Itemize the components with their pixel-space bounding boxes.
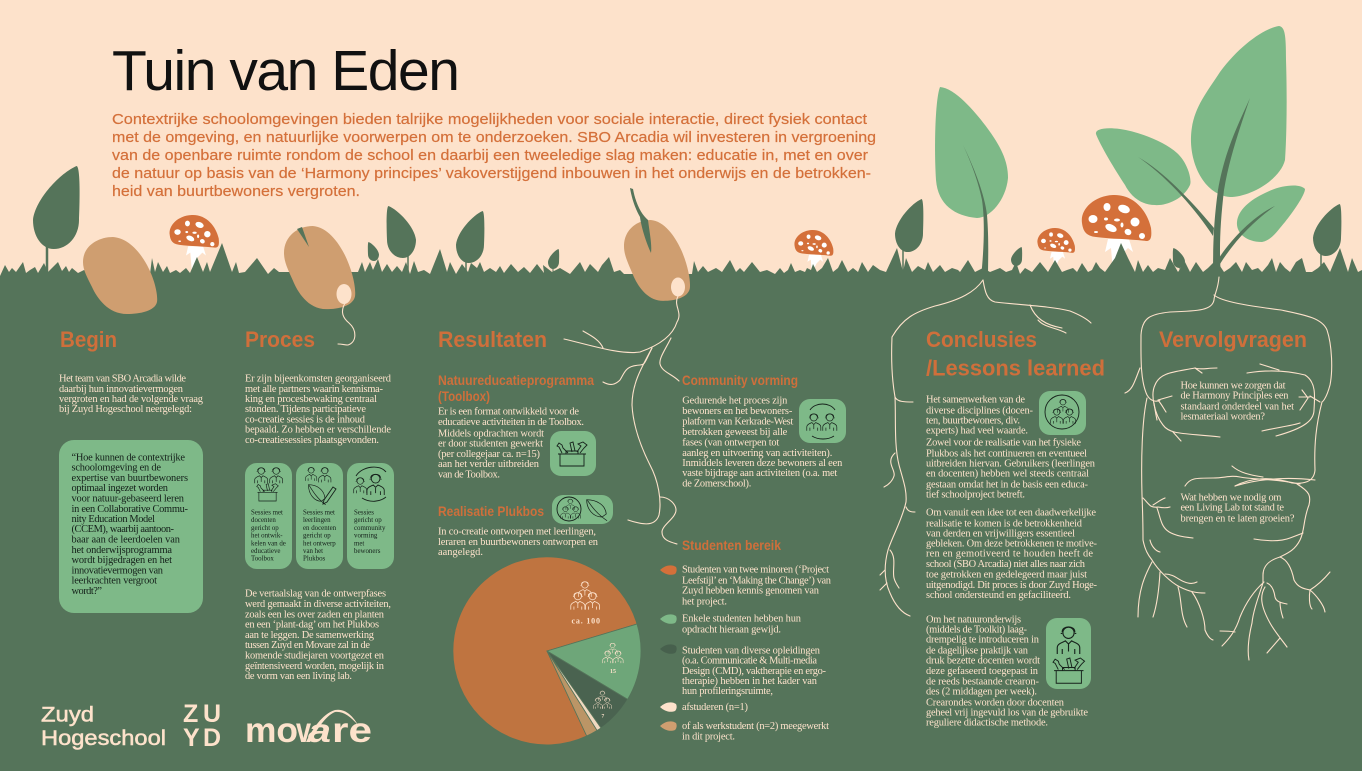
callout: research question: schoolomgeving en de	[72, 462, 161, 474]
text: natuuronderwijs: geheel vrij ingevuld los van de gebruikte	[926, 708, 1088, 718]
card: sessies met docenten: educatieve	[251, 548, 280, 555]
text: natuuronderwijs	[926, 614, 1088, 728]
card: sessies community vorming: community	[354, 525, 386, 532]
legend item: minoren	[660, 564, 832, 608]
block: Realisatie Plukbos: leraren en buurtbewoners ontworpen en	[438, 537, 599, 548]
question: Living Lab	[1180, 492, 1295, 524]
callout: research question	[59, 440, 203, 613]
block: Studenten bereik legend: Studenten bereik	[682, 537, 781, 553]
text: vertaalslag: geïntensiveerd worden, mogelijk in	[245, 661, 385, 672]
question: Harmony Principles: de Harmony Principles een	[1180, 390, 1289, 402]
seed: begin	[83, 237, 157, 314]
block: Community vorming: vaste bijdrage aan activiteiten (o.a. met	[682, 468, 837, 479]
text: betrokkenheid: van derden en vrijwilligers essentieel	[926, 528, 1075, 540]
callout: research question: in een Collaborative Commu-	[72, 504, 189, 515]
block: Natuureducatieprogramma: (per collegejaar ca. n=15)	[438, 449, 540, 460]
block: Realisatie Plukbos	[438, 495, 613, 558]
text: betrokkenheid	[926, 508, 1098, 601]
callout: research question: wordt?”	[72, 586, 102, 597]
callout: research question: nity Education Model	[72, 514, 155, 525]
mushroom: middle	[1037, 228, 1075, 270]
block: Community vorming: betrokken geweest bij alle	[682, 427, 788, 438]
heading: Conclusies / Lessons learned: Conclusies	[926, 327, 1037, 352]
logo: ZU YD: ZU	[183, 700, 221, 728]
slice: ca. 100	[453, 557, 637, 745]
text: vertaalslag: de vorm van een living lab.	[245, 671, 352, 682]
text: vertaalslag: zoals een les over zaden en planten	[245, 610, 385, 620]
text: vertaalslag: werd gemaakt in diverse activiteiten,	[245, 599, 391, 610]
icon: teacher with toolbox	[1046, 618, 1091, 689]
block: Studenten bereik legend	[660, 537, 832, 742]
icon: two people with leaf and pencil	[306, 467, 336, 505]
question: Living Lab: een Living Lab tot stand te	[1180, 502, 1284, 514]
legend item: afstuderen: afstuderen (n=1)	[682, 702, 748, 713]
label: 7: 7	[602, 714, 604, 720]
legend item: minoren: Zuyd hebben kennis genomen van	[682, 586, 820, 596]
legend item: minoren: Leefstijl’ en ‘Making the Change’) van	[682, 576, 832, 586]
question: Harmony Principles: Hoe kunnen we zorgen dat	[1180, 380, 1286, 392]
slice: 15	[547, 624, 641, 699]
block: Community vorming	[682, 372, 846, 490]
card: sessies met leerlingen: het ontwerp	[303, 540, 336, 548]
text: natuuronderwijs: deze gefaseerd toegepast in	[926, 666, 1039, 677]
card: sessies met docenten: docenten	[251, 517, 276, 524]
logo: Zuyd Hogeschool: Hogeschool	[41, 727, 166, 750]
text: betrokkenheid: toe getrokken en gedelegeerd maar juist	[926, 570, 1087, 580]
plant: sprout with one leaf	[935, 87, 1008, 277]
text: natuuronderwijs: de reeds bestaande crearon-	[926, 676, 1040, 688]
panel: Resultaten	[438, 327, 846, 742]
grass and soil	[0, 243, 1362, 771]
card: sessies met docenten: kelen van de	[251, 540, 286, 548]
block: Community vorming: Inmiddels leveren deze bewoners al een	[682, 458, 843, 469]
mushroom: large	[1082, 195, 1151, 272]
text: disciplines	[926, 394, 1096, 500]
text: introduction	[59, 374, 203, 415]
text: disciplines: Plukbos als het continueren en eventueel	[926, 448, 1087, 460]
callout: research question: wordt bijgedragen en het	[72, 555, 172, 566]
callout: research question: optimaal ingezet worden	[72, 483, 169, 494]
legend item: opleidingen: hun profileringsruimte,	[682, 686, 773, 697]
slice: 7	[547, 651, 628, 728]
text: betrokkenheid: realisatie te komen is de betrokkenheid	[926, 518, 1083, 530]
logo: Movare: re	[332, 711, 372, 750]
text: natuuronderwijs: Om het natuuronderwijs	[926, 614, 1021, 626]
logo: Zuyd Hogeschool	[41, 704, 166, 750]
legend item: opleidingen: therapie) hebben in het kader van	[682, 676, 818, 687]
legend item: minoren: Studenten van twee minoren (‘Project	[682, 564, 829, 576]
text: bijeenkomsten: met alle partners waarin kennisma-	[245, 384, 384, 395]
text: betrokkenheid: school (SBO Arcadia) niet alles naar zich	[926, 559, 1086, 570]
card: sessies community vorming: Sessies	[354, 510, 374, 516]
text: vertaalslag: tussen Zuyd en Movare zal in de	[245, 640, 370, 651]
card: sessies community vorming	[347, 463, 394, 569]
text: disciplines: uitbreiden hiervan. Gebruikers (leerlingen	[926, 458, 1096, 470]
card: sessies met leerlingen	[296, 463, 343, 569]
heading: Conclusies / Lessons learned	[926, 327, 1105, 380]
intro text: de natuur op basis van de ‘Harmony principes’ vakoverstijgend inbouwen in het onderwijs en de betrokken-	[112, 165, 871, 182]
card: sessies met leerlingen: van het	[303, 548, 323, 555]
pie chart: student reach	[453, 557, 640, 744]
block: Realisatie Plukbos: aangelegd.	[438, 547, 483, 558]
small dark leaves with stems	[33, 166, 1341, 276]
text: disciplines: experts) had veel waarde.	[926, 426, 1028, 436]
panel: Begin	[59, 327, 203, 613]
card: sessies met leerlingen: Plukbos	[303, 556, 326, 562]
text: vertaalslag: komende studiejaren voortgezet en	[245, 650, 385, 662]
text: disciplines: Het samenwerken van de	[926, 394, 1025, 406]
card: sessies community vorming: met	[354, 540, 364, 548]
text: disciplines: diverse disciplines (docen-	[926, 406, 1034, 416]
question: Harmony Principles: standaard onderdeel van het	[1180, 402, 1294, 412]
card: sessies met docenten: het ontwik-	[251, 532, 283, 540]
legend item: opleidingen: Design (CMD), vaktherapie en ergo-	[682, 666, 827, 677]
logo: ZU YD: YD	[183, 724, 221, 752]
panel: Vervolgvragen	[1159, 327, 1307, 524]
legend item: minoren: het project.	[682, 596, 727, 608]
block: Community vorming: Community vorming	[682, 372, 798, 388]
text: natuuronderwijs: Crearondes worden door docenten	[926, 698, 1065, 708]
card: sessies community vorming: vorming	[354, 532, 378, 540]
plant: large plant with three leaves	[1096, 26, 1305, 277]
logo: Movare: mo	[245, 711, 298, 750]
card: sessies met docenten: gericht op	[251, 525, 279, 532]
label: 7	[593, 691, 612, 720]
callout: research question: expertise van buurtbewoners	[72, 473, 188, 484]
seed: proces with small sprout and root	[284, 226, 355, 345]
text: natuuronderwijs: druk bezette docenten wordt	[926, 656, 1040, 666]
text: natuuronderwijs: des (2 middagen per week).	[926, 686, 1037, 698]
slice: werkstudent	[547, 651, 597, 736]
text: bijeenkomsten: co-creatiesessies plaatsgevonden.	[245, 435, 379, 446]
text: vertaalslag: aan te leggen. De samenwerking	[245, 630, 374, 641]
intro text: met de omgeving, en natuurlijke voorwerpen om te onderzoeken. SBO Arcadia wil investeren in vergroening	[112, 129, 876, 146]
callout: research question: leerkrachten vergroot	[72, 576, 157, 586]
roots: resultaten	[564, 296, 679, 544]
icon: residents in a cycle	[799, 399, 846, 443]
heading: Conclusies / Lessons learned: /Lessons learned	[926, 356, 1105, 380]
question: Living Lab: brengen en te laten groeien?	[1180, 514, 1295, 524]
block: Natuureducatieprogramma: aan het verder uitbreiden	[438, 459, 540, 470]
text: disciplines: en docenten) hebben wel steeds centraal	[926, 468, 1089, 480]
text: bijeenkomsten: Er zijn bijeenkomsten georganiseerd	[245, 374, 392, 384]
roots: conclusies	[880, 280, 1091, 616]
label: 15	[603, 643, 623, 675]
text: betrokkenheid: ren en gemotiveerd te houden heeft de	[926, 548, 1093, 560]
icon: two residents in a cycle	[354, 467, 386, 501]
block: Natuureducatieprogramma	[438, 372, 596, 480]
text: betrokkenheid: Om vanuit een idee tot een daadwerkelijke	[926, 508, 1096, 518]
block: Realisatie Plukbos: In co-creatie ontworpen met leerlingen,	[438, 526, 596, 538]
slice: afstuderen	[547, 651, 601, 730]
label: 15: 15	[610, 669, 616, 675]
panel: Proces	[245, 327, 394, 682]
intro text: Contextrijke schoolomgevingen bieden talrijke mogelijkheden voor sociale interactie, direct fysiek contact	[112, 111, 868, 128]
logo: Movare: a	[308, 712, 331, 749]
block: Community vorming: fases (van ontwerpen tot	[682, 438, 779, 448]
text: bijeenkomsten: stonden. Tijdens participatieve	[245, 404, 366, 415]
card: sessies met docenten: Sessies met	[251, 510, 283, 516]
callout: research question: “Hoe kunnen de contextrijke	[72, 452, 185, 464]
logo: Movare: v	[296, 711, 311, 750]
text: introduction: bij Zuyd Hogeschool neergelegd:	[59, 404, 192, 415]
callout: research question: voor natuur-gebaseerd leren	[72, 494, 185, 504]
icon: toolbox	[550, 431, 596, 476]
block: Natuureducatieprogramma: educatieve activiteiten in de Toolbox.	[438, 417, 584, 428]
text: betrokkenheid: uitgenodigd. Dit proces is door Zuyd Hoge-	[926, 580, 1098, 591]
heading: Proces: Proces	[245, 327, 315, 352]
panel: Conclusies	[926, 327, 1105, 728]
text: disciplines: gestaan omdat het in de basis een educa-	[926, 480, 1089, 490]
callout: research question: innovatievermogen van	[72, 565, 164, 576]
card: sessies met leerlingen: leerlingen	[303, 517, 331, 524]
block: Natuureducatieprogramma: (Toolbox)	[438, 388, 490, 404]
icon: two people with toolbox	[255, 468, 283, 501]
intro text: heid van buurtbewoners vergroten.	[112, 183, 360, 200]
heading: Begin: Begin	[60, 327, 117, 352]
text: betrokkenheid: gebleken. Om deze betrokkenen te motive-	[926, 538, 1098, 550]
card: sessies met leerlingen: gericht op	[303, 532, 331, 540]
text: natuuronderwijs: reguliere didactische methode.	[926, 718, 1048, 728]
text: vertaalslag: De vertaalslag van de ontwerpfases	[245, 588, 386, 600]
logo: Movare	[245, 710, 372, 750]
legend item: opleidingen	[660, 644, 827, 697]
legend item: opdracht: Enkele studenten hebben hun	[682, 614, 802, 624]
block: Community vorming: de Zomerschool).	[682, 478, 751, 490]
mushroom: small right group	[794, 230, 833, 273]
text: bijeenkomsten: bepaald. Zo hebben er verschillende	[245, 424, 391, 436]
block: Natuureducatieprogramma: Er is een format ontwikkeld voor de	[438, 406, 579, 418]
text: natuuronderwijs: (middels de Toolkit) laag-	[926, 624, 1028, 636]
block: Community vorming: Gedurende het proces zijn	[682, 396, 788, 406]
mushroom: left	[170, 215, 219, 270]
text: introduction: daarbij hun innovatievermogen	[59, 384, 184, 395]
block: Realisatie Plukbos: Realisatie Plukbos	[438, 503, 544, 519]
block: Community vorming: bewoners en het bewoners-	[682, 406, 793, 417]
card: sessies met leerlingen: en docenten	[303, 525, 337, 532]
legend item: werkstudent: of als werkstudent (n=2) meegewerkt	[682, 721, 829, 732]
legend item: werkstudent	[660, 721, 829, 742]
block: Community vorming: aanleg en uitvoering van activiteiten).	[682, 448, 832, 459]
question: Harmony Principles: lesmateriaal worden?	[1180, 412, 1265, 422]
callout: research question: baar aan de leerdoelen van	[72, 534, 181, 546]
text: bijeenkomsten: king en procesbewaking centraal	[245, 394, 377, 405]
card: sessies met leerlingen: Sessies met	[303, 510, 335, 516]
label: ca. 100: ca. 100	[572, 616, 600, 626]
heading: Resultaten: Resultaten	[438, 327, 547, 352]
text: natuuronderwijs: drempelig te introduceren in	[926, 634, 1040, 646]
intro text	[112, 111, 876, 200]
block: Community vorming: platform van Kerkrade-West	[682, 416, 793, 428]
text: betrokkenheid: school ondersteund en gefaciliteerd.	[926, 590, 1071, 601]
heading: Vervolgvragen: Vervolgvragen	[1159, 327, 1307, 352]
card: sessies community vorming: gericht op	[354, 517, 382, 524]
icon: people and leaf	[552, 495, 613, 524]
seed: resultaten with shoot and root	[624, 188, 690, 301]
text: natuuronderwijs: de dagelijkse praktijk van	[926, 646, 1029, 656]
text: bijeenkomsten	[245, 374, 392, 446]
text: introduction: vergroten en had de volgende vraag	[59, 394, 203, 405]
block: Natuureducatieprogramma: Middels opdrachten wordt	[438, 428, 544, 440]
logo: ZU YD	[183, 700, 221, 752]
text: introduction: Het team van SBO Arcadia wilde	[59, 374, 186, 384]
text: disciplines: tief schoolproject betreft.	[926, 490, 1025, 500]
question: Harmony Principles	[1180, 380, 1294, 422]
text: vertaalslag	[245, 588, 391, 682]
text: disciplines: Zowel voor de realisatie van het fysieke	[926, 438, 1081, 448]
card: sessies community vorming: bewoners	[354, 548, 381, 555]
legend item: opleidingen: (o.a. Communicatie & Multi-media	[682, 656, 817, 666]
legend item: opleidingen: Studenten van diverse opleidingen	[682, 646, 821, 656]
callout: research question: het onderwijsprogramma	[72, 545, 172, 556]
text: disciplines: ten, buurtbewoners, div.	[926, 416, 1020, 426]
card: sessies met docenten	[245, 463, 292, 569]
card: sessies met docenten: Toolbox	[251, 556, 274, 562]
roots: vervolgvragen	[1125, 277, 1332, 660]
text: bijeenkomsten: co-creatie sessies is de inhoud	[245, 414, 366, 425]
label: ca. 100	[571, 582, 600, 626]
intro text: van de openbare ruimte rondom de school en daarbij een tweeledige slag maken: educatie in, met en over	[112, 147, 868, 164]
text: vertaalslag: en een ‘plant-dag’ om het Plukbos	[245, 620, 379, 630]
block: Natuureducatieprogramma: Natuureducatieprogramma	[438, 372, 594, 388]
legend item: opdracht: opdracht hieraan gewijd.	[682, 624, 781, 636]
icon: three people in circle	[1039, 391, 1086, 435]
title: Tuin van Eden	[112, 39, 460, 103]
logo: Zuyd Hogeschool: Zuyd	[41, 704, 94, 726]
block: Natuureducatieprogramma: er door studenten gewerkt	[438, 438, 543, 450]
callout: research question: (CCEM), waarbij aantoon-	[72, 524, 175, 535]
legend item: werkstudent: in dit project.	[682, 732, 735, 742]
block: Natuureducatieprogramma: van de Toolbox.	[438, 470, 500, 480]
question: Living Lab: Wat hebben we nodig om	[1180, 492, 1282, 504]
legend item: opdracht	[660, 614, 802, 636]
